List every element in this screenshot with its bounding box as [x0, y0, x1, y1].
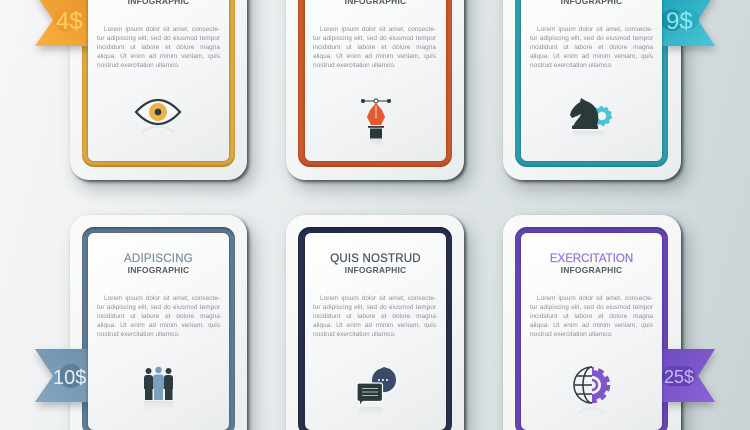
ribbon: 10$ price: 10$ — [53, 367, 86, 389]
body text — [97, 295, 220, 338]
body text: nostrud exercitation ullamco. — [97, 331, 180, 338]
ribbon: 4$ price: 4$ — [56, 8, 83, 35]
body text: incididunt ut labore et dolore magna — [97, 313, 220, 320]
ribbon: 25$ price: 25$ — [664, 367, 694, 387]
heading: ADIPISCING — [124, 253, 193, 265]
body text: Lorem ipsum dolor sit amet, consecte- — [104, 295, 220, 302]
body text: tur adipiscing elit, sed do eiusmod tempor — [97, 35, 220, 42]
subtitle: INFOGRAPHIC — [345, 265, 406, 275]
body text — [530, 295, 653, 338]
body text: incididunt ut labore et dolore magna — [530, 313, 653, 320]
body text: Lorem ipsum dolor sit amet, consecte- — [104, 26, 220, 33]
body text: nostrud exercitation ullamco. — [313, 331, 396, 338]
icon: chat bubbles — [356, 367, 396, 411]
coloured frame — [515, 227, 668, 430]
subtitle: INFOGRAPHIC — [128, 265, 189, 275]
body text: Lorem ipsum dolor sit amet, consecte- — [320, 295, 436, 302]
body text: tur adipiscing elit, sed do eiusmod tempor — [313, 304, 436, 311]
body text: nostrud exercitation ullamco. — [530, 331, 613, 338]
body text: aliqua. Ut enim ad minim veniam, quis — [313, 322, 436, 329]
icon: knight and gear — [570, 98, 612, 134]
coloured frame — [82, 0, 235, 167]
content panel — [88, 0, 229, 161]
icon: team of people — [144, 366, 173, 405]
subtitle: INFOGRAPHIC — [561, 265, 622, 275]
body text: aliqua. Ut enim ad minim veniam, quis — [530, 53, 653, 60]
panel: card 6 exercitation — [503, 215, 681, 430]
body text: Lorem ipsum dolor sit amet, consecte- — [320, 26, 436, 33]
coloured frame — [298, 0, 452, 167]
ribbon: 10$ price — [35, 349, 88, 410]
content panel — [305, 0, 446, 161]
icon: eye — [134, 98, 182, 132]
ribbon: 9$ price: 9$ — [666, 8, 693, 35]
body text: incididunt ut labore et dolore magna — [97, 44, 220, 51]
panel: card 1 eye — [70, 0, 247, 180]
body text: tur adipiscing elit, sed do eiusmod tempor — [530, 35, 653, 42]
body text: incididunt ut labore et dolore magna — [313, 313, 436, 320]
body text: tur adipiscing elit, sed do eiusmod tempor — [530, 304, 653, 311]
body text: aliqua. Ut enim ad minim veniam, quis — [530, 322, 653, 329]
content panel — [88, 233, 229, 430]
body text: incididunt ut labore et dolore magna — [313, 44, 436, 51]
heading: QUIS NOSTRUD — [330, 253, 421, 265]
body text: nostrud exercitation ullamco. — [97, 62, 180, 69]
body text: tur adipiscing elit, sed do eiusmod tempor — [97, 304, 220, 311]
body text: Lorem ipsum dolor sit amet, consecte- — [537, 295, 653, 302]
panel: card 5 quis nostrud — [286, 215, 464, 430]
panel: card 2 pen — [286, 0, 464, 180]
panel: card 4 adipiscing — [70, 215, 247, 430]
body text: nostrud exercitation ullamco. — [313, 62, 396, 69]
heading: EXERCITATION — [550, 253, 633, 265]
panel: card 3 knight — [503, 0, 681, 180]
icon: pen tool — [361, 98, 391, 142]
coloured frame — [82, 227, 235, 430]
body text — [313, 295, 436, 338]
coloured frame — [515, 0, 668, 167]
body text: aliqua. Ut enim ad minim veniam, quis — [313, 53, 436, 60]
ribbon: 4$ price — [35, 0, 88, 54]
body text: aliqua. Ut enim ad minim veniam, quis — [97, 53, 220, 60]
ribbon: 9$ price — [662, 0, 717, 54]
body text — [97, 26, 220, 69]
body text — [313, 26, 436, 69]
body text: tur adipiscing elit, sed do eiusmod tempor — [313, 35, 436, 42]
body text: Lorem ipsum dolor sit amet, consecte- — [537, 26, 653, 33]
body text: aliqua. Ut enim ad minim veniam, quis — [97, 322, 220, 329]
icon: globe and gear — [573, 366, 610, 414]
body text: nostrud exercitation ullamco. — [530, 62, 613, 69]
content panel — [521, 233, 662, 430]
ribbon: 25$ price — [662, 349, 717, 410]
coloured frame — [298, 227, 452, 430]
body text — [530, 26, 653, 69]
body text: incididunt ut labore et dolore magna — [530, 44, 653, 51]
content panel — [521, 0, 662, 161]
content panel — [305, 233, 446, 430]
